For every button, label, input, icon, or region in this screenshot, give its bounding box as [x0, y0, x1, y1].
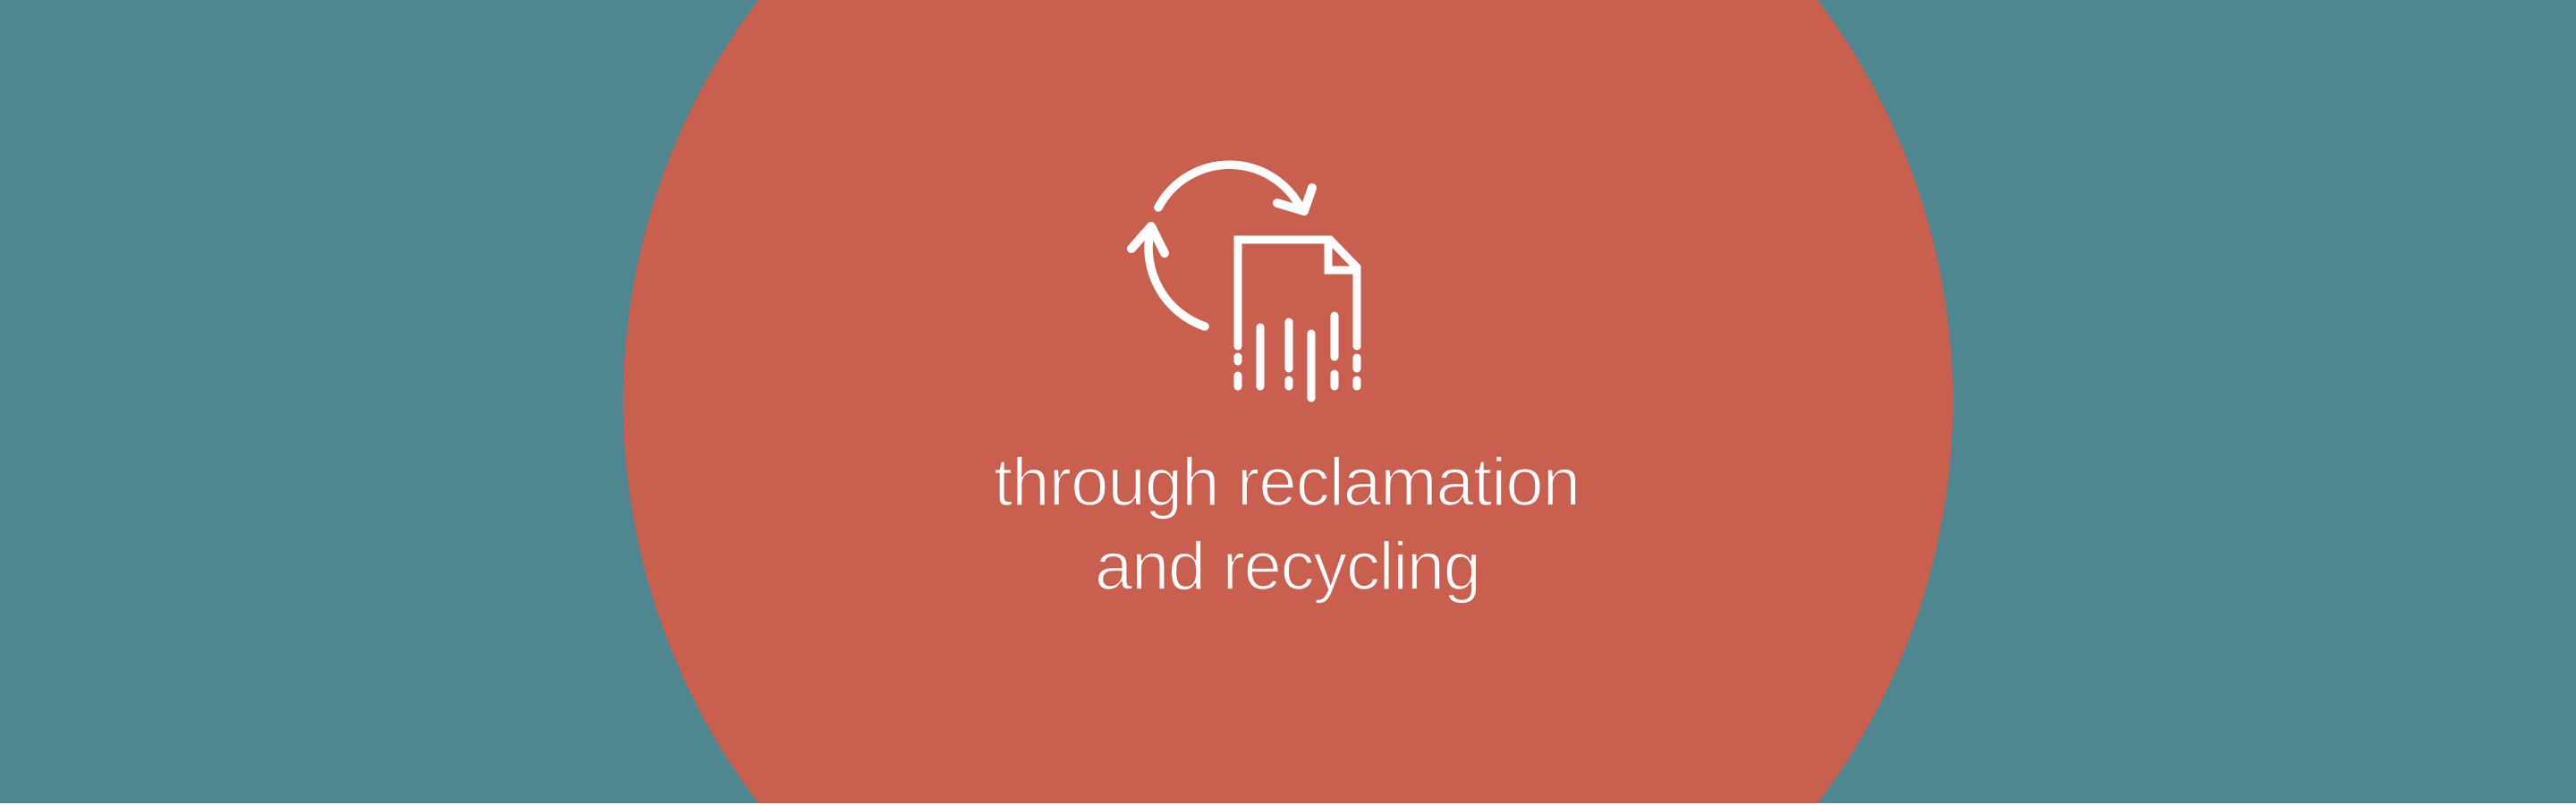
icon: lower-left return arrow [1131, 226, 1205, 326]
icon: shredded strips [1238, 316, 1357, 398]
icon: paper sheet outline with fold [1238, 240, 1357, 346]
coral circle [623, 0, 1953, 803]
text block: caption [994, 445, 1580, 605]
icon: paper corner fold [1328, 240, 1357, 270]
icon: clockwise top arrow [1158, 165, 1312, 211]
caption line 2: and recycling [1095, 529, 1481, 605]
icon: recycling shredded paper [1131, 165, 1357, 398]
caption line 1: through reclamation [994, 445, 1580, 521]
